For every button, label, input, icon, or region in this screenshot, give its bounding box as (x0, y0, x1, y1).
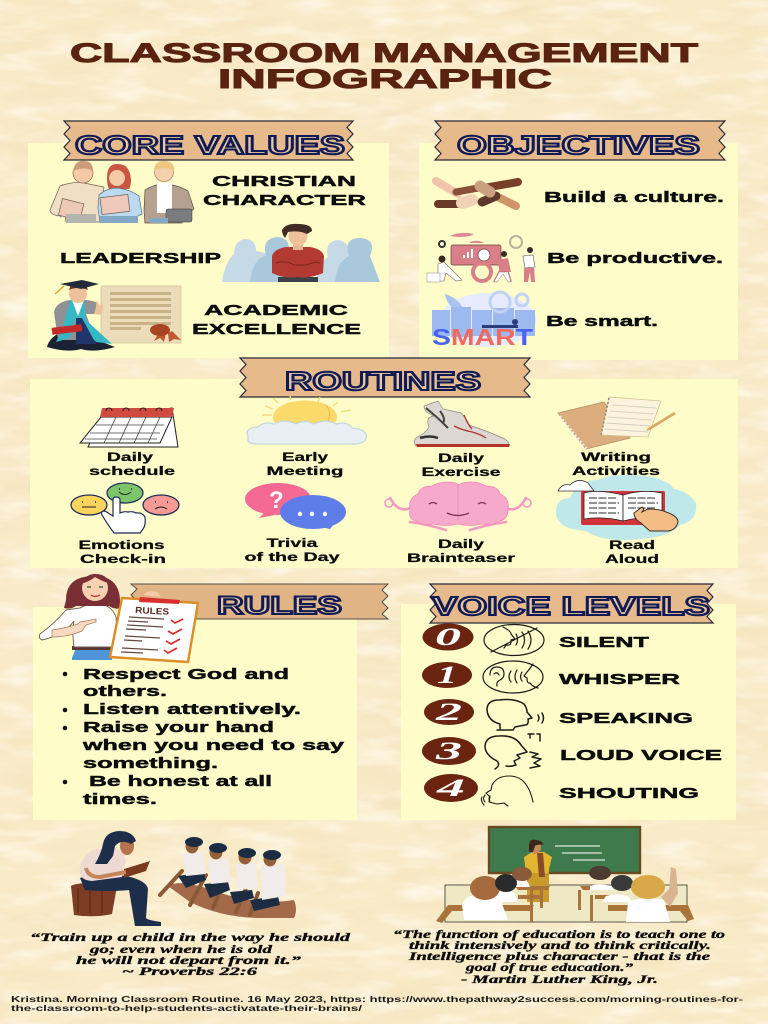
label: read aloud: Read (609, 540, 655, 552)
level 0: silent: 0 (435, 624, 462, 651)
list: rules: something. (83, 755, 218, 772)
panel: rules (33, 574, 388, 820)
quote: Martin Luther King, Jr. (393, 927, 725, 986)
icon: notebooks and pencil (558, 397, 676, 449)
label: daily schedule: Daily (107, 452, 154, 464)
text: Academic Excellence: EXCELLENCE (192, 321, 361, 338)
quote: Proverbs 22:6: “Train up a child in the way he should (30, 930, 352, 944)
level 2: speaking: SPEAKING (559, 710, 693, 727)
banner: voice levels (430, 584, 713, 623)
reference citation: Kristina. Morning Classroom Routine. 16 May 2023, https: https://www.thepathway2success.com/morning-routines-for- (11, 995, 743, 1004)
icon: speech bubbles trivia: ? (269, 487, 284, 514)
teacher at the board (524, 840, 552, 902)
label: writing activities (572, 452, 660, 478)
text: build a culture: Build a culture. (544, 189, 724, 206)
list: rules: Respect God and (83, 666, 289, 683)
banner: routines (240, 358, 530, 397)
quote: Proverbs 22:6: ~ Proverbs 22:6 (122, 964, 257, 978)
level 3: loud voice: 3 (434, 738, 462, 765)
quote: Martin Luther King, Jr.: think intensively and to think critically. (409, 938, 711, 952)
level 3: loud voice: LOUD VOICE (560, 747, 722, 764)
level 4: shouting (424, 774, 699, 806)
list: rules: others. (83, 683, 167, 700)
icon: meditating brain (385, 482, 531, 530)
label: read aloud: Aloud (605, 554, 659, 566)
level 1: whisper: 1 (437, 662, 457, 689)
level 0: silent (422, 624, 649, 656)
quote: Proverbs 22:6: he will not depart from it.” (76, 953, 301, 967)
icon: graduate with diploma (47, 280, 181, 351)
banner: voice levels: VOICE LEVELS (432, 591, 710, 621)
panel: objectives (419, 121, 738, 360)
reference citation (11, 995, 743, 1013)
level 2: speaking (424, 699, 693, 730)
level 0: silent: SILENT (559, 634, 649, 651)
list: rules: times. (83, 791, 157, 808)
label: daily brainteaser: Brainteaser (407, 553, 516, 565)
banner: core values (64, 121, 353, 160)
list: rules: Raise your hand (83, 719, 274, 736)
icon: SMART graphic (432, 292, 536, 350)
banner: rules: RULES (217, 592, 342, 620)
label: emotions check-in: Emotions (78, 540, 164, 552)
label: trivia of the day: Trivia (266, 538, 318, 550)
icon: sneaker (414, 401, 510, 447)
students from behind (462, 866, 678, 922)
label: writing activities: Activities (572, 466, 660, 478)
level 2: speaking: 2 (434, 699, 462, 726)
icon: joined hands (436, 181, 518, 206)
icon: leader with team silhouettes (222, 224, 380, 282)
quote: Proverbs 22:6 (30, 930, 352, 978)
banner: core values: CORE VALUES (75, 130, 345, 160)
text: Christian Character: CHARACTER (203, 192, 366, 209)
text: Academic Excellence: ACADEMIC (204, 302, 348, 319)
level 1: whisper: WHISPER (559, 671, 680, 688)
desks (436, 886, 694, 923)
level 4: shouting: SHOUTING (559, 785, 699, 802)
panel: core values (28, 121, 389, 358)
text: Leadership: LEADERSHIP (60, 250, 221, 267)
level 3: loud voice (422, 734, 722, 769)
quote: Martin Luther King, Jr.: “The function of education is to teach one to (393, 927, 725, 941)
title: CLASSROOM MANAGEMENT (70, 38, 699, 68)
icon: speech bubbles trivia (245, 483, 346, 529)
icon: SMART graphic: SMAR T (432, 324, 533, 350)
label: early meeting: Meeting (266, 466, 344, 478)
icon: teacher holding rules clipboard (39, 574, 121, 660)
quote: Martin Luther King, Jr.: Intelligence plus character - that is the (407, 949, 711, 963)
label: writing activities: Writing (581, 452, 651, 464)
quote: Martin Luther King, Jr.: - Martin Luther King, Jr. (461, 972, 658, 986)
pupils on a log (160, 837, 296, 918)
label: daily brainteaser: Daily (438, 539, 485, 551)
banner: objectives: OBJECTIVES (457, 130, 700, 160)
icon: rules clipboard: RULES (135, 605, 169, 617)
label: trivia of the day (244, 538, 341, 564)
label: emotions check-in (78, 540, 166, 566)
reference citation: the-classroom-to-help-students-activatate-their-brains/ (11, 1004, 363, 1013)
label: early meeting (266, 452, 344, 478)
banner: objectives (435, 121, 725, 160)
list: rules: Be honest at all (89, 773, 272, 790)
label: daily exercise: Daily (438, 453, 485, 465)
level 1: whisper (422, 661, 680, 693)
panel: routines (30, 358, 738, 568)
label: trivia of the day: of the Day (244, 552, 341, 564)
icon: emotions check-in (71, 483, 179, 533)
label: emotions check-in: Check-in (80, 554, 166, 566)
title: INFOGRAPHIC (218, 64, 552, 94)
label: daily exercise (422, 453, 500, 479)
label: early meeting: Early (282, 452, 329, 464)
text: Academic Excellence (192, 302, 361, 338)
label: read aloud (605, 540, 659, 566)
level 4: shouting: 4 (435, 775, 465, 802)
panel: voice levels (401, 584, 736, 820)
text: Christian Character: CHRISTIAN (212, 173, 356, 190)
icon: productive team with gears (427, 233, 535, 282)
list: rules: when you need to say (81, 737, 345, 754)
label: daily exercise: Exercise (422, 467, 500, 479)
text: Christian Character (203, 173, 366, 209)
illustration: teacher reading to pupils (71, 831, 296, 926)
quote: Proverbs 22:6: go; even when he is old (88, 942, 274, 956)
label: daily schedule (89, 452, 175, 478)
text: be smart: Be smart. (546, 313, 658, 330)
banner: rules (131, 584, 388, 620)
icon: open book read aloud (556, 475, 696, 540)
label: daily schedule: schedule (89, 466, 175, 478)
icon: sun and cloud (247, 396, 366, 444)
icon: three students (50, 161, 194, 223)
text: be productive: Be productive. (547, 250, 723, 267)
label: daily brainteaser (407, 539, 516, 565)
quote: Martin Luther King, Jr.: goal of true education.” (465, 960, 633, 974)
list: rules: Listen attentively. (83, 701, 301, 718)
list: rules (63, 666, 345, 808)
icon: rules clipboard (110, 591, 198, 662)
icon: calendar (80, 408, 178, 447)
banner: routines: ROUTINES (285, 366, 481, 396)
title (70, 38, 699, 94)
illustration: classroom with teacher and students (436, 827, 694, 923)
